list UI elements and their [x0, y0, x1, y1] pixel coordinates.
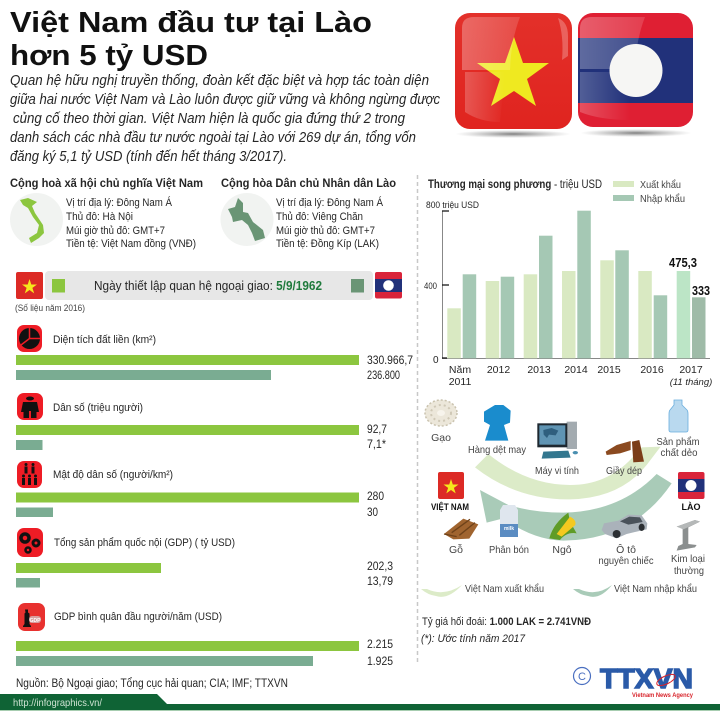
icon: people group [17, 461, 42, 488]
icon: small Vietnam flag [16, 272, 43, 299]
label: fertilizer: Phân bón [489, 544, 529, 556]
panel: Laos profile: Cộng hòa Dân chủ Nhân dân Lào [221, 178, 396, 190]
panel: Laos profile: Múi giờ thủ đô: GMT+7 [276, 225, 375, 237]
panel: population density: Mật độ dân số (người/km²) [53, 469, 173, 481]
icon: shoes [606, 440, 644, 462]
icon: small Laos flag [375, 272, 402, 298]
panel: population: 92,7 [367, 424, 387, 436]
legend: Nhập khẩu [640, 193, 685, 205]
intro text block: Quan hệ hữu nghị truyền thống, đoàn kết đặc biệt và hợp tác toàn diện [10, 73, 429, 89]
panel: population density [16, 461, 384, 519]
exchange rate: Tỷ giá hối đoái: 1.000 LAK = 2.741VNĐ [422, 616, 591, 628]
value labels [669, 256, 710, 298]
icon: person [17, 393, 43, 420]
legend: imports [573, 583, 697, 597]
source: Nguồn: Bộ Ngoại giao; Tổng cục hải quan; CIA; IMF; TTXVN [16, 678, 288, 690]
label: corn: Ngô [552, 544, 572, 556]
label: car line 2: nguyên chiếc [598, 555, 654, 567]
panel: Vietnam profile: Thủ đô: Hà Nội [66, 211, 133, 223]
icon: rice [425, 400, 457, 426]
label: Vietnam: VIỆT NAM [431, 501, 469, 512]
panel: population density: 30 [367, 507, 378, 519]
year labels: (11 tháng) [670, 377, 712, 388]
panel: land area: 236.800 [367, 370, 400, 382]
axis: 0 [433, 355, 439, 366]
label: Laos: LÀO [682, 502, 700, 512]
panel: population: Dân số (triệu người) [53, 402, 143, 414]
panel: population: 7,1* [367, 439, 386, 451]
year labels [449, 364, 712, 388]
panel: land area: 330.966,7 [367, 355, 413, 367]
intro text block: đăng ký 5,1 tỷ USD (tính đến hết tháng 3/2017). [10, 149, 287, 165]
note: data year: (Số liệu năm 2016) [15, 303, 85, 314]
title [10, 7, 372, 72]
label: base metals line 2: thường [674, 565, 704, 577]
title: Việt Nam đầu tư tại Lào [10, 7, 372, 39]
panel: GDP: 202,3 [367, 561, 393, 573]
axis [424, 200, 710, 366]
bars [447, 260, 690, 358]
panel: Laos profile: Vị trí địa lý: Đông Nam Á [276, 196, 384, 209]
panel: Vietnam profile: Tiền tệ: Việt Nam đồng (VNĐ) [66, 238, 196, 250]
panel: Vietnam profile: Vị trí địa lý: Đông Nam Á [66, 196, 173, 209]
panel: GDP per capita: GDP bình quân đầu người/năm (USD) [54, 611, 222, 623]
arrow: Vietnam imports [480, 474, 672, 541]
value labels: 333 [692, 284, 710, 298]
banner: diplomatic relations date [45, 271, 373, 300]
icon: computer [537, 422, 578, 459]
panel: population density: 280 [367, 491, 384, 503]
intro text block: củng cố theo thời gian. Việt Nam hiện là quốc gia đứng thứ 2 trong [13, 111, 405, 127]
icon: water bottle [669, 400, 688, 432]
legend [613, 179, 685, 205]
diagram: trade flow [425, 400, 705, 577]
label: textiles: Hàng dệt may [468, 444, 527, 456]
icon: fertilizer bag [500, 505, 518, 537]
icon: Laos flag [678, 472, 704, 499]
intro text block [10, 73, 441, 165]
footnote: (*): Ước tính năm 2017 [421, 633, 526, 645]
icon: GDP person [18, 603, 45, 631]
icon: large Laos flag [578, 13, 693, 137]
logo: TTXVN [574, 663, 693, 699]
icon: large Vietnam flag [455, 13, 572, 138]
panel: GDP per capita [16, 603, 393, 668]
icon: wood [444, 519, 478, 539]
legend: exports: Việt Nam xuất khẩu [465, 583, 544, 595]
year labels: 2015 [597, 364, 621, 376]
value labels: 475,3 [669, 256, 697, 270]
icon: car [602, 515, 647, 538]
year labels: 2016 [640, 364, 664, 376]
icon: pie chart [17, 325, 42, 352]
label: footwear: Giầy dép [606, 465, 642, 477]
label: computer: Máy vi tính [535, 465, 579, 477]
legend: Xuất khẩu [640, 179, 681, 191]
legend: imports: Việt Nam nhập khẩu [614, 583, 697, 595]
chart title: Thương mại song phương - triệu USD [428, 179, 602, 191]
panel: Laos profile: Thủ đô: Viêng Chăn [276, 211, 363, 223]
panel: population [16, 393, 387, 451]
icon: fertilizer bag: milk [504, 526, 514, 532]
panel: Vietnam profile: Múi giờ thủ đô: GMT+7 [66, 225, 165, 237]
label: plastics line 2: chất dẻo [660, 447, 698, 459]
year labels: 2011 [449, 376, 471, 388]
panel: land area: Diện tích đất liền (km²) [53, 334, 156, 346]
panel: Vietnam profile: Cộng hoà xã hội chủ nghĩa Việt Nam [10, 178, 203, 190]
logo: TTXVN: C [578, 671, 586, 683]
label: car: Ô tô [616, 543, 636, 556]
year labels: Năm [449, 364, 471, 376]
year labels: 2017 [679, 364, 703, 376]
year labels: 2012 [487, 364, 510, 376]
year labels: 2013 [527, 364, 551, 376]
panel: GDP per capita: 2.215 [367, 639, 393, 651]
icon: Vietnam flag [438, 472, 464, 499]
label: wood: Gỗ [449, 543, 463, 556]
icon: steel beam [677, 520, 700, 551]
chart: bilateral trade [424, 179, 712, 388]
panel: Vietnam profile [10, 178, 203, 250]
panel: GDP: 13,79 [367, 576, 393, 588]
year labels: 2014 [564, 364, 588, 376]
label: plastics: Sản phẩm [656, 436, 700, 448]
icon: corn [549, 513, 577, 540]
icon: GDP person: GDP [30, 618, 41, 624]
footer bar [0, 694, 720, 711]
axis: 400 [424, 281, 437, 292]
panel: GDP [16, 528, 393, 588]
arrow: Vietnam exports [475, 447, 661, 499]
panel: Laos profile [220, 178, 396, 250]
logo: TTXVN: Vietnam News Agency [632, 692, 693, 699]
panel: GDP per capita: 1.925 [367, 656, 393, 668]
panel: land area [16, 325, 413, 382]
intro text block: giữa hai nước Việt Nam và Lào luôn được giữ vững và không ngừng được [10, 92, 441, 108]
legend: exports [421, 583, 544, 597]
logo: TTXVN: TTXVN [600, 663, 693, 694]
panel: Laos profile: Tiền tệ: Đồng Kíp (LAK) [276, 238, 379, 250]
banner: diplomatic relations date: Ngày thiết lập quan hệ ngoại giao: 5/9/1962 [94, 278, 322, 293]
footer bar: http://infographics.vn/ [13, 697, 102, 709]
icon: shirt [484, 405, 511, 441]
icon: gears [17, 528, 43, 557]
label: rice: Gạo [431, 432, 451, 444]
panel: GDP: Tổng sản phẩm quốc nội (GDP) ( tỷ USD) [54, 537, 235, 549]
label: base metals: Kim loại [671, 553, 705, 565]
axis: 800 triệu USD [426, 200, 479, 211]
title: hơn 5 tỷ USD [10, 40, 208, 72]
intro text block: danh sách các nhà đầu tư nước ngoài tại Lào với 269 dự án, tổng vốn [10, 130, 416, 146]
